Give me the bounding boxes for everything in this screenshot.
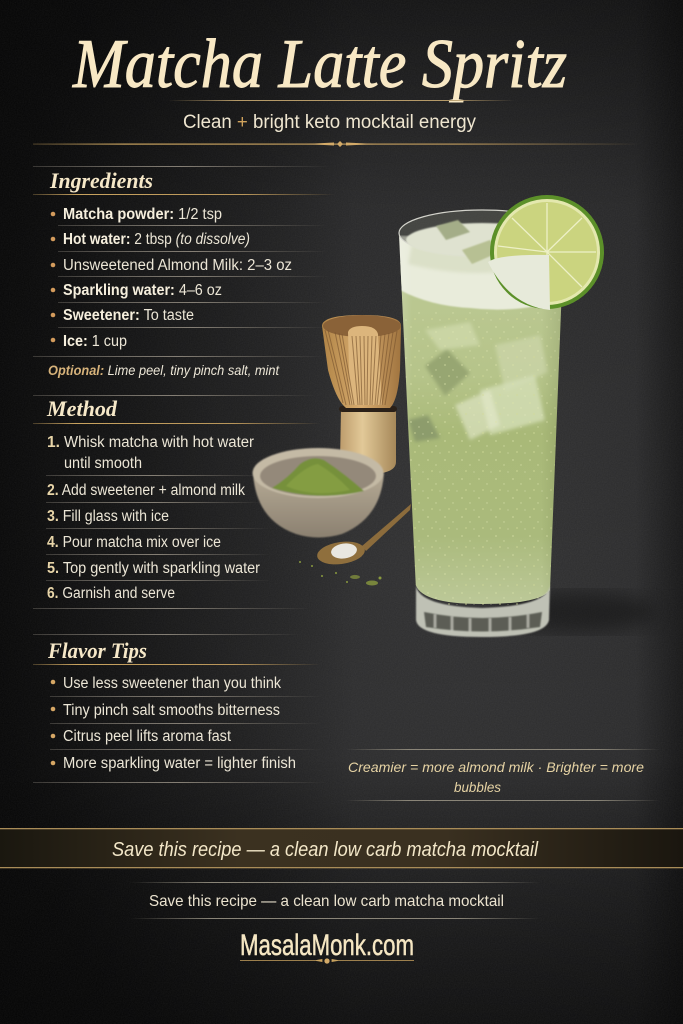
optional note: Optional: Lime peel, tiny pinch salt, mint bbox=[48, 362, 280, 378]
illustration: matcha scene bbox=[252, 195, 655, 637]
step 6: 6. Garnish and serve bbox=[47, 585, 175, 602]
tip 2: Tiny pinch salt smooths bitterness bbox=[63, 702, 280, 719]
tip 1: Use less sweetener than you think bbox=[63, 675, 281, 692]
ice cubes bbox=[408, 322, 548, 442]
brand ornament dot bbox=[324, 958, 330, 964]
table shadow bbox=[495, 592, 655, 632]
ornament bbox=[305, 141, 376, 147]
panel: method: Whisk matcha with hot water bbox=[64, 434, 254, 451]
icon: lime slice bbox=[488, 195, 604, 310]
ingredient: hot water: Hot water: 2 tbsp (to dissolve) bbox=[63, 231, 250, 248]
foam bbox=[399, 235, 533, 310]
callout: variations note: bubbles bbox=[454, 779, 501, 795]
matcha powder bbox=[272, 458, 364, 496]
icon: bamboo whisk bbox=[322, 315, 401, 474]
heading: ingredients: Ingredients bbox=[49, 168, 153, 193]
ingredient: sparkling water: Sparkling water: 4–6 oz bbox=[63, 282, 222, 299]
brand ornament bbox=[240, 960, 414, 962]
icon: wooden spoon with salt bbox=[316, 504, 411, 567]
spilled matcha bbox=[299, 561, 382, 586]
glass base bbox=[416, 585, 550, 637]
callout: variations note: Creamier = more almond milk · Brighter = more bbox=[348, 759, 644, 775]
banner: Save this recipe — a clean low carb matcha mocktail bbox=[112, 839, 539, 861]
tip 4: More sparkling water = lighter finish bbox=[63, 755, 296, 772]
panel: method: until smooth bbox=[64, 455, 142, 472]
panel: ingredients bbox=[33, 166, 335, 396]
ingredient: sweetener: Sweetener: To taste bbox=[63, 307, 194, 324]
brand name: MasalaMonk.com bbox=[240, 929, 414, 962]
step 5: 5. Top gently with sparkling water bbox=[47, 560, 260, 577]
subtitle: Clean + bright keto mocktail energy bbox=[183, 112, 476, 133]
ingredient: almond milk: Unsweetened Almond Milk: 2–3 oz bbox=[63, 257, 292, 274]
callout: variations note bbox=[345, 749, 660, 801]
tip 3: Citrus peel lifts aroma fast bbox=[63, 728, 232, 745]
panel: flavor tips bbox=[33, 634, 326, 783]
step 3: 3. Fill glass with ice bbox=[47, 508, 169, 525]
ingredient: ice: Ice: 1 cup bbox=[63, 333, 127, 350]
banner bbox=[0, 828, 683, 868]
heading: method: Method bbox=[46, 396, 118, 421]
drink liquid bbox=[400, 262, 566, 604]
title block bbox=[33, 26, 640, 147]
panel: method bbox=[33, 396, 320, 609]
step 4: 4. Pour matcha mix over ice bbox=[47, 534, 221, 551]
ice in foam bbox=[436, 220, 500, 264]
icon: matcha bowl bbox=[252, 448, 384, 538]
step 2: 2. Add sweetener + almond milk bbox=[47, 482, 245, 499]
foam inside rim bbox=[406, 223, 558, 257]
icon: glass of matcha spritz bbox=[395, 195, 604, 637]
footer tagline: Save this recipe — a clean low carb matcha mocktail bbox=[149, 893, 504, 910]
footer bbox=[130, 882, 540, 962]
heading: flavor tips: Flavor Tips bbox=[47, 638, 147, 663]
step 1: 1. bbox=[47, 434, 60, 451]
title: Matcha Latte Spritz bbox=[72, 26, 567, 103]
glass rim bbox=[399, 210, 565, 256]
ingredient: matcha powder: Matcha powder: 1/2 tsp bbox=[63, 206, 222, 223]
